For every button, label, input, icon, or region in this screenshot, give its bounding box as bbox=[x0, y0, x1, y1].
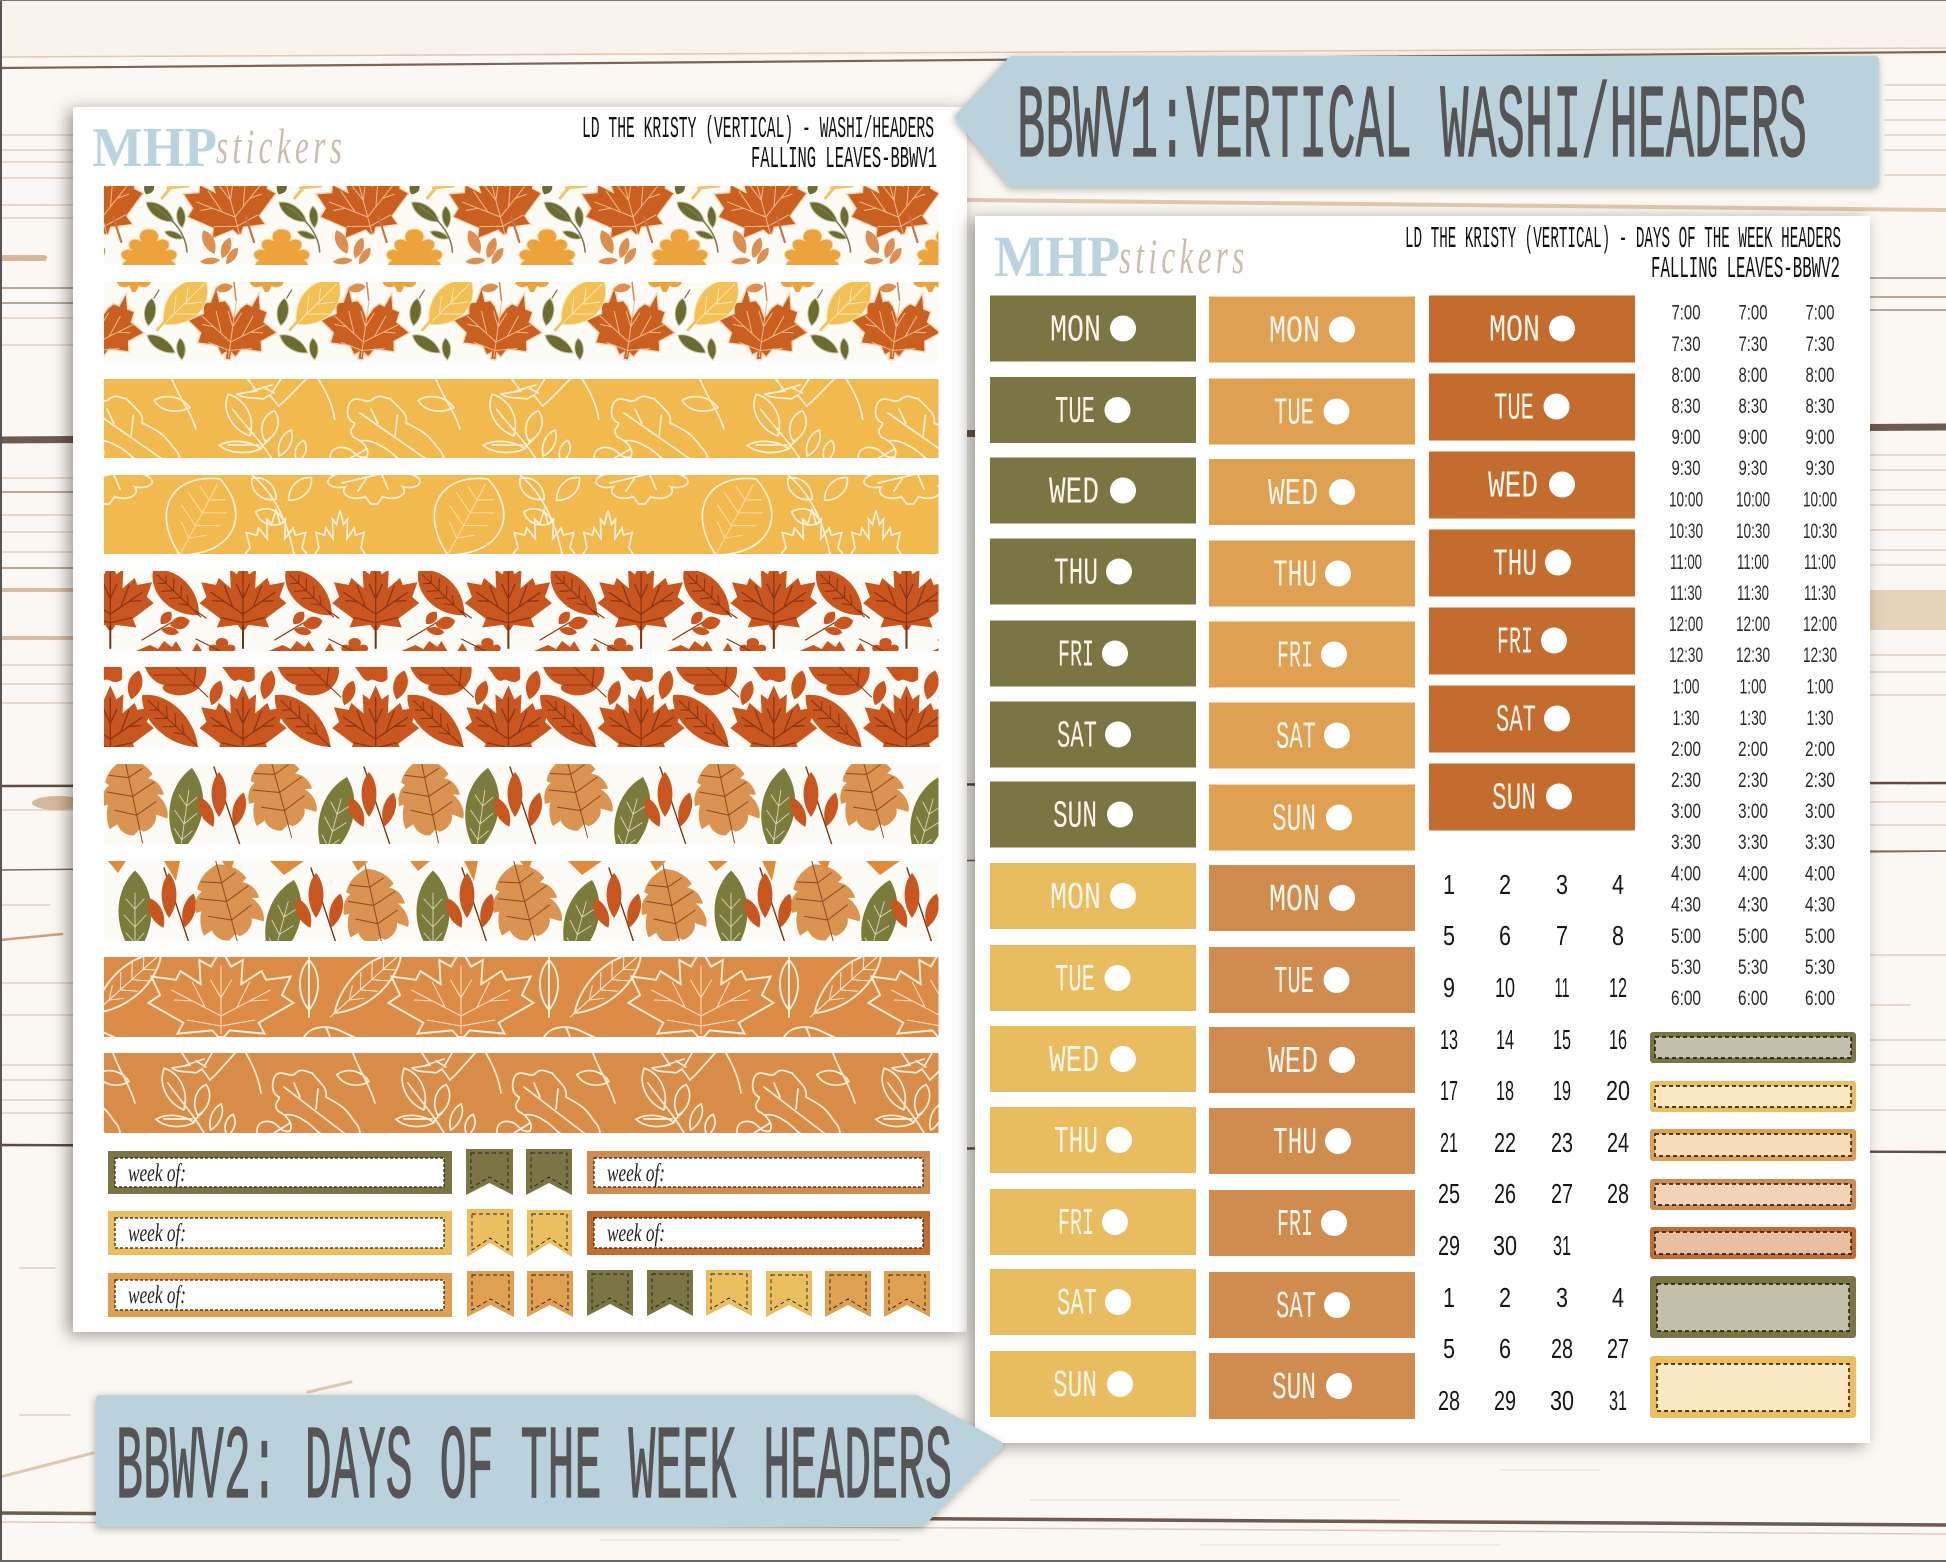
date number grid: 16 bbox=[1609, 1024, 1627, 1055]
time columns: 9:00 bbox=[1738, 426, 1768, 449]
time columns: 2:00 bbox=[1738, 738, 1768, 761]
date number grid: 6 bbox=[1499, 1333, 1511, 1364]
washi strip 3: yellow with outlined leaves bbox=[104, 379, 938, 458]
date number grid: 23 bbox=[1551, 1127, 1573, 1158]
panel: washi sheet BBWV1: FALLING LEAVES-BBWV1 bbox=[751, 142, 937, 177]
date number grid: 1 bbox=[1443, 1282, 1455, 1313]
panel: washi sheet BBWV1 bbox=[0, 107, 1169, 1332]
day headers: olive column: MON bbox=[1050, 310, 1101, 352]
date number grid: 4 bbox=[1612, 1282, 1624, 1313]
time columns: 8:30 bbox=[1806, 395, 1834, 418]
day headers: rust column: THU bbox=[1493, 544, 1537, 586]
day headers: tan column bbox=[1209, 865, 1415, 1419]
day headers: tan column: SAT bbox=[1276, 1286, 1316, 1329]
date number grid: 28 bbox=[1551, 1333, 1573, 1364]
time columns: 9:00 bbox=[1672, 426, 1700, 449]
time columns: 7:30 bbox=[1672, 333, 1700, 356]
washi strip 9: tan with outlined maple bbox=[104, 957, 938, 1037]
week-of header: rust: week of: bbox=[607, 1220, 665, 1247]
time columns: 12:30 bbox=[1669, 644, 1703, 667]
time columns: 10:30 bbox=[1803, 520, 1837, 543]
day headers: yellow column: MON bbox=[1050, 877, 1101, 920]
week-of header: orange: week of: bbox=[128, 1282, 186, 1309]
day headers: tan column: SUN bbox=[1272, 1367, 1316, 1410]
time columns: 5:30 bbox=[1738, 956, 1768, 979]
date number grid: 30 bbox=[1493, 1230, 1517, 1261]
label strips bbox=[1650, 1032, 1856, 1259]
day headers: tan column: TUE bbox=[1274, 961, 1314, 1004]
day headers: tan column: MON bbox=[1269, 879, 1320, 922]
time columns: 11:00 bbox=[1670, 551, 1702, 574]
date number grid: 5 bbox=[1443, 920, 1455, 951]
date number grid: 31 bbox=[1553, 1230, 1571, 1261]
week-of header: tan bbox=[587, 1151, 930, 1194]
logo: MHP stickers (sheet 2): MHP bbox=[994, 224, 1120, 289]
time columns: 9:30 bbox=[1738, 457, 1768, 480]
time columns: 2:30 bbox=[1738, 769, 1768, 792]
time columns: 9:30 bbox=[1672, 457, 1700, 480]
time columns: 2:30 bbox=[1805, 769, 1835, 792]
day headers: yellow column: WED bbox=[1049, 1040, 1099, 1083]
time columns: 5:30 bbox=[1671, 956, 1701, 979]
date number grid: 12 bbox=[1609, 972, 1627, 1003]
washi strip 4: yellow with outlined leaves bbox=[104, 475, 938, 554]
date number grid: 30 bbox=[1550, 1385, 1574, 1416]
day headers: yellow column: TUE bbox=[1055, 959, 1095, 1002]
time columns: 3:30 bbox=[1671, 831, 1701, 854]
day headers: rust column: MON bbox=[1489, 310, 1540, 352]
time columns: 8:30 bbox=[1672, 395, 1700, 418]
date number grid: 28 bbox=[1607, 1178, 1629, 1209]
time columns: 11:00 bbox=[1804, 551, 1836, 574]
time columns: 10:30 bbox=[1669, 520, 1703, 543]
date number grid: 5 bbox=[1443, 1333, 1455, 1364]
time columns: 9:00 bbox=[1806, 426, 1834, 449]
time columns: 1:30 bbox=[1740, 707, 1766, 730]
date number grid: 27 bbox=[1607, 1333, 1629, 1364]
week-of header: olive bbox=[108, 1151, 452, 1194]
date number grid: 6 bbox=[1499, 920, 1511, 951]
day headers: yellow column bbox=[990, 863, 1196, 1417]
day headers: olive column: THU bbox=[1054, 552, 1098, 596]
time columns: 8:00 bbox=[1806, 364, 1834, 387]
time columns: 10:00 bbox=[1669, 488, 1703, 512]
date number grid: 8 bbox=[1612, 920, 1624, 951]
logo: MHP stickers (sheet 2) bbox=[994, 224, 1244, 289]
day headers: yellow column: SAT bbox=[1057, 1283, 1097, 1326]
time columns: 4:00 bbox=[1738, 862, 1768, 886]
logo: MHP stickers (sheet 2): stickers bbox=[1119, 229, 1244, 284]
time columns: 1:00 bbox=[1740, 676, 1766, 698]
sheet title bbox=[582, 112, 937, 177]
day headers: rust column bbox=[1429, 296, 1635, 830]
time columns: 12:00 bbox=[1736, 613, 1770, 636]
day headers: olive column: WED bbox=[1049, 472, 1099, 514]
time columns: 2:30 bbox=[1671, 769, 1701, 792]
day headers: rust column: SUN bbox=[1492, 778, 1536, 820]
time columns: 10:00 bbox=[1736, 488, 1770, 512]
date number grid: 26 bbox=[1494, 1178, 1516, 1209]
washi strip 1: maple and oak on cream bbox=[104, 186, 938, 265]
time columns: 8:30 bbox=[1738, 395, 1768, 418]
logo: MHP stickers (sheet 1): stickers bbox=[216, 119, 342, 174]
time columns: 11:30 bbox=[1804, 582, 1836, 605]
week-of header: orange bbox=[108, 1273, 452, 1317]
date number grid: 20 bbox=[1606, 1075, 1630, 1106]
date number grid: 2 bbox=[1499, 1282, 1511, 1313]
date number grid: 15 bbox=[1553, 1024, 1571, 1055]
day headers: rust column: WED bbox=[1488, 466, 1538, 508]
date number grid: 19 bbox=[1553, 1075, 1571, 1106]
day headers: olive column: FRI bbox=[1058, 634, 1094, 678]
day headers: orange column: WED bbox=[1268, 473, 1318, 516]
washi strip 2: maple and yellow leaves bbox=[104, 282, 938, 361]
day headers: rust column: SAT bbox=[1496, 700, 1536, 742]
day headers: olive column: SUN bbox=[1053, 796, 1097, 838]
date number grid: 4 bbox=[1612, 869, 1624, 900]
time columns: 3:00 bbox=[1805, 800, 1835, 823]
time columns: 8:00 bbox=[1738, 364, 1768, 387]
time columns: 4:30 bbox=[1738, 894, 1768, 916]
time columns: 1:00 bbox=[1672, 676, 1700, 698]
date number grid: 21 bbox=[1440, 1127, 1458, 1158]
time columns: 7:00 bbox=[1738, 302, 1768, 324]
washi strip 8: orange and green leaves bbox=[104, 861, 938, 941]
time columns: 11:30 bbox=[1737, 582, 1769, 605]
time columns: 10:00 bbox=[1803, 488, 1837, 512]
time columns: 5:00 bbox=[1671, 925, 1701, 948]
date number grid: 1 bbox=[1443, 869, 1455, 900]
time columns: 4:00 bbox=[1805, 862, 1835, 886]
time columns: 7:30 bbox=[1738, 333, 1768, 356]
day headers: orange column: SUN bbox=[1272, 798, 1316, 842]
day headers: tan column: FRI bbox=[1277, 1204, 1313, 1247]
day headers: orange column bbox=[1209, 296, 1415, 850]
time columns: 7:00 bbox=[1806, 302, 1834, 324]
date number grid: 24 bbox=[1607, 1127, 1629, 1158]
time columns: 6:00 bbox=[1738, 987, 1768, 1010]
washi strip 10: tan with outlined oak bbox=[104, 1053, 938, 1133]
time columns: 6:00 bbox=[1671, 987, 1701, 1010]
day headers: yellow column: SUN bbox=[1053, 1365, 1097, 1408]
day headers: tan column: WED bbox=[1268, 1041, 1318, 1084]
washi strip 5: rust maple bbox=[104, 571, 938, 651]
day headers: olive column bbox=[990, 296, 1196, 848]
time columns: 4:00 bbox=[1671, 862, 1701, 886]
week-of header: rust bbox=[587, 1211, 930, 1255]
time columns: 4:30 bbox=[1805, 894, 1835, 916]
banner: BBWV2 days of the week headers bbox=[100, 1399, 999, 1529]
panel: days of the week sheet BBWV2 bbox=[975, 216, 1870, 1443]
date number grid: 29 bbox=[1438, 1230, 1460, 1261]
date number grid: 3 bbox=[1556, 1282, 1568, 1313]
date number grid: 17 bbox=[1440, 1075, 1458, 1106]
day headers: orange column: MON bbox=[1269, 310, 1320, 354]
day headers: olive column: SAT bbox=[1057, 716, 1097, 758]
date number grid: 2 bbox=[1499, 869, 1511, 900]
time columns: 8:00 bbox=[1672, 364, 1700, 387]
date number grid: 31 bbox=[1609, 1385, 1627, 1416]
day headers: yellow column: FRI bbox=[1058, 1203, 1094, 1246]
bookmark flags bbox=[466, 1149, 930, 1317]
time columns: 7:00 bbox=[1672, 302, 1700, 324]
time columns bbox=[1669, 302, 1837, 1010]
time columns: 9:30 bbox=[1806, 457, 1834, 480]
time columns: 4:30 bbox=[1671, 894, 1701, 916]
washi strip 7: orange and green leaves bbox=[104, 764, 938, 844]
day headers: tan column: THU bbox=[1273, 1122, 1317, 1165]
time columns: 12:30 bbox=[1736, 644, 1770, 667]
time columns: 3:30 bbox=[1738, 831, 1768, 854]
time columns: 6:00 bbox=[1805, 987, 1835, 1010]
logo: MHP stickers (sheet 1): MHP bbox=[92, 117, 217, 179]
time columns: 11:00 bbox=[1737, 551, 1769, 574]
sheet title bbox=[1405, 222, 1841, 287]
day headers: olive column: TUE bbox=[1055, 391, 1095, 434]
date number grid: 14 bbox=[1496, 1024, 1514, 1055]
date number grid: 13 bbox=[1440, 1024, 1458, 1055]
day headers: orange column: THU bbox=[1273, 554, 1317, 598]
date number grid: 10 bbox=[1495, 972, 1515, 1003]
time columns: 1:00 bbox=[1806, 676, 1834, 698]
date number grid: 9 bbox=[1443, 972, 1455, 1003]
date number grid: 25 bbox=[1438, 1178, 1460, 1209]
time columns: 11:30 bbox=[1670, 582, 1702, 605]
time columns: 12:00 bbox=[1803, 613, 1837, 636]
date number grid: 11 bbox=[1554, 972, 1570, 1003]
time columns: 10:30 bbox=[1736, 520, 1770, 543]
time columns: 3:30 bbox=[1805, 831, 1835, 854]
time columns: 2:00 bbox=[1805, 738, 1835, 761]
week-of header: olive: week of: bbox=[128, 1160, 186, 1187]
time columns: 7:30 bbox=[1806, 333, 1834, 356]
week-of header: tan: week of: bbox=[607, 1160, 665, 1187]
date number grid: 29 bbox=[1494, 1385, 1516, 1416]
time columns: 3:00 bbox=[1738, 800, 1768, 823]
date number grid: 7 bbox=[1556, 920, 1568, 951]
time columns: 2:00 bbox=[1671, 738, 1701, 761]
date number grid: 27 bbox=[1551, 1178, 1573, 1209]
large label boxes bbox=[1650, 1276, 1856, 1418]
day headers: rust column: FRI bbox=[1497, 622, 1533, 664]
time columns: 1:30 bbox=[1806, 707, 1834, 730]
date number grid: 18 bbox=[1496, 1075, 1514, 1106]
day headers: orange column: SAT bbox=[1276, 716, 1316, 760]
time columns: 12:00 bbox=[1669, 613, 1703, 636]
week-of header: yellow bbox=[108, 1211, 452, 1255]
time columns: 3:00 bbox=[1671, 800, 1701, 823]
day headers: yellow column: THU bbox=[1054, 1121, 1098, 1164]
date number grid: 22 bbox=[1494, 1127, 1516, 1158]
date number grid: 3 bbox=[1556, 869, 1568, 900]
time columns: 5:00 bbox=[1805, 925, 1835, 948]
time columns: 1:30 bbox=[1672, 707, 1700, 730]
logo: MHP stickers (sheet 1) bbox=[92, 117, 342, 179]
day headers: orange column: TUE bbox=[1274, 392, 1314, 436]
panel: washi sheet BBWV1: LD THE KRISTY (VERTICAL) - WASHI/HEADERS bbox=[582, 112, 934, 147]
day headers: rust column: TUE bbox=[1494, 388, 1534, 430]
time columns: 12:30 bbox=[1803, 644, 1837, 667]
date number grid: 28 bbox=[1438, 1385, 1460, 1416]
week-of header: yellow: week of: bbox=[128, 1220, 186, 1247]
washi strip 6: rust maple bbox=[104, 667, 938, 747]
date number grid bbox=[1438, 869, 1630, 1416]
day headers: orange column: FRI bbox=[1277, 636, 1313, 678]
time columns: 5:00 bbox=[1738, 925, 1768, 948]
time columns: 5:30 bbox=[1805, 956, 1835, 979]
